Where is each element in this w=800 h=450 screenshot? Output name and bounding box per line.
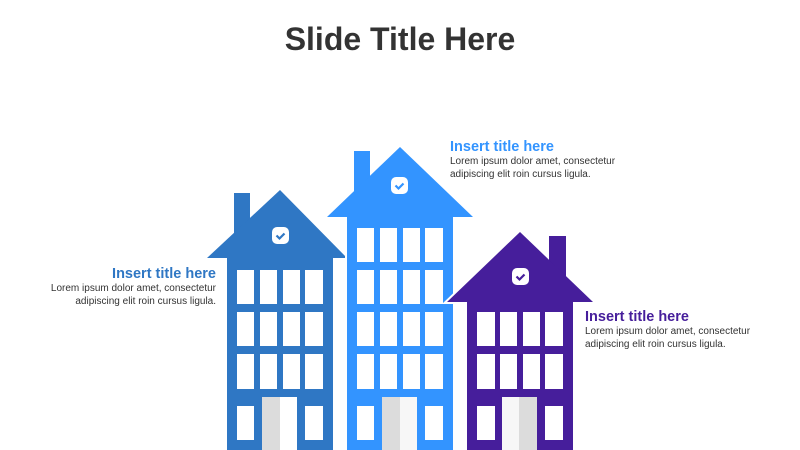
title: Slide Title Here [285,21,515,57]
icon: check left [272,227,289,244]
text block: middle: adipiscing elit roin cursus ligula. [450,168,591,180]
house: left [207,190,347,450]
icon: check middle [391,177,408,194]
text block: left [51,266,216,306]
text block: right: Insert title here [585,309,689,325]
text block: middle [450,139,615,180]
icon: check right [512,268,529,285]
text block: right [585,309,750,350]
house: right [447,232,593,450]
text block: middle: Lorem ipsum dolor amet, consectetur [450,156,615,167]
house: middle [327,147,473,450]
text block: left: adipiscing elit roin cursus ligula. [75,296,216,306]
text block: left: Lorem ipsum dolor amet, consectetur [51,283,216,294]
text block: left: Insert title here [112,266,216,282]
text block: right: adipiscing elit roin cursus ligula. [585,338,726,350]
text block: right: Lorem ipsum dolor amet, consectetur [585,326,750,337]
text block: middle: Insert title here [450,139,554,155]
